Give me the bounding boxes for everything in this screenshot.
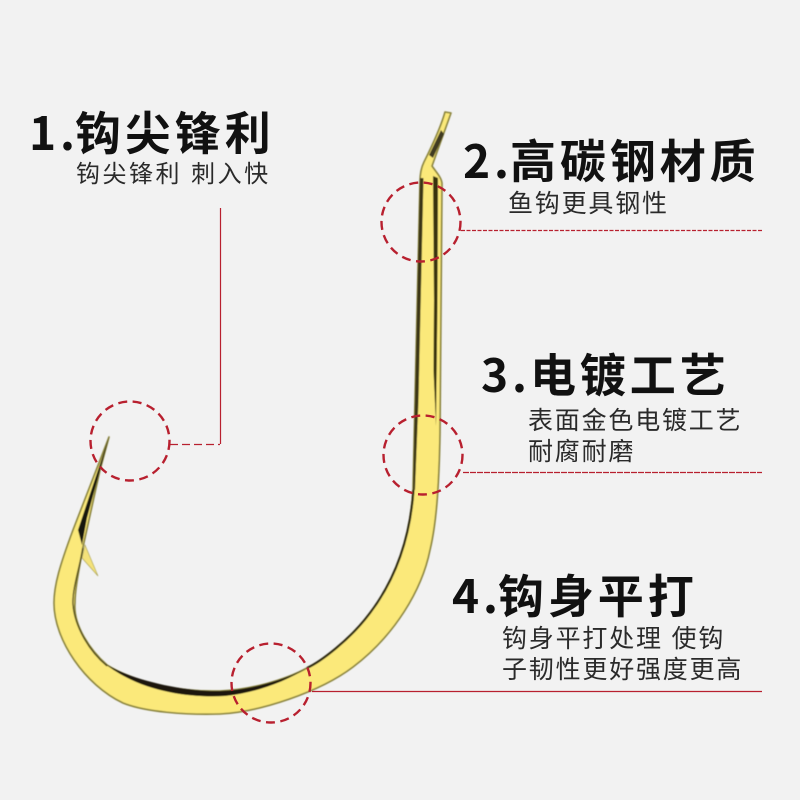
description 4 — [502, 625, 743, 684]
leader line 2 — [461, 230, 762, 232]
description 4: 钩身平打处理 使钩 — [502, 625, 725, 653]
inner groove — [73, 548, 107, 666]
dashed circle 3 — [384, 416, 462, 494]
heading 2: 高碳钢材质 — [510, 126, 760, 192]
heading 3: 电镀工艺 — [530, 340, 730, 406]
hook body — [54, 112, 451, 714]
callout 3: shaft lower — [384, 416, 762, 494]
heading 4: 4. — [452, 561, 502, 627]
description 3 — [528, 407, 742, 466]
dashed circle 1 — [90, 402, 170, 480]
callout 4: bend — [232, 644, 762, 722]
shaft left dark line — [413, 178, 424, 490]
leader line 1 — [170, 444, 220, 446]
eye dark stripe — [429, 130, 444, 158]
leader line 3 — [463, 472, 762, 474]
callout 2: shaft top — [382, 182, 762, 262]
heading 4: 钩身平打 — [498, 561, 698, 627]
belly groove — [307, 490, 414, 668]
heading 2: 2. — [463, 126, 513, 192]
fishing hook — [54, 112, 451, 714]
bend shadow — [104, 663, 307, 696]
shaft right dark line — [433, 176, 438, 426]
description 3: 耐腐耐磨 — [528, 438, 635, 466]
description 2: 鱼钩更具钢性 — [508, 190, 669, 218]
heading 1: 钩尖锋利 — [75, 98, 275, 164]
point dark facet — [78, 437, 109, 545]
description 1: 钩尖锋利 刺入快 — [76, 161, 271, 188]
description 3: 表面金色电镀工艺 — [528, 407, 742, 435]
barb — [82, 545, 98, 576]
heading 3: 3. — [481, 340, 531, 406]
callout 1: hook point — [90, 208, 220, 480]
description 4: 子韧性更好强度更高 — [502, 656, 743, 684]
leader line 4 — [312, 690, 762, 692]
dashed circle 2 — [382, 182, 460, 262]
heading 1: 1. — [29, 98, 79, 164]
dashed circle 4 — [232, 644, 310, 722]
